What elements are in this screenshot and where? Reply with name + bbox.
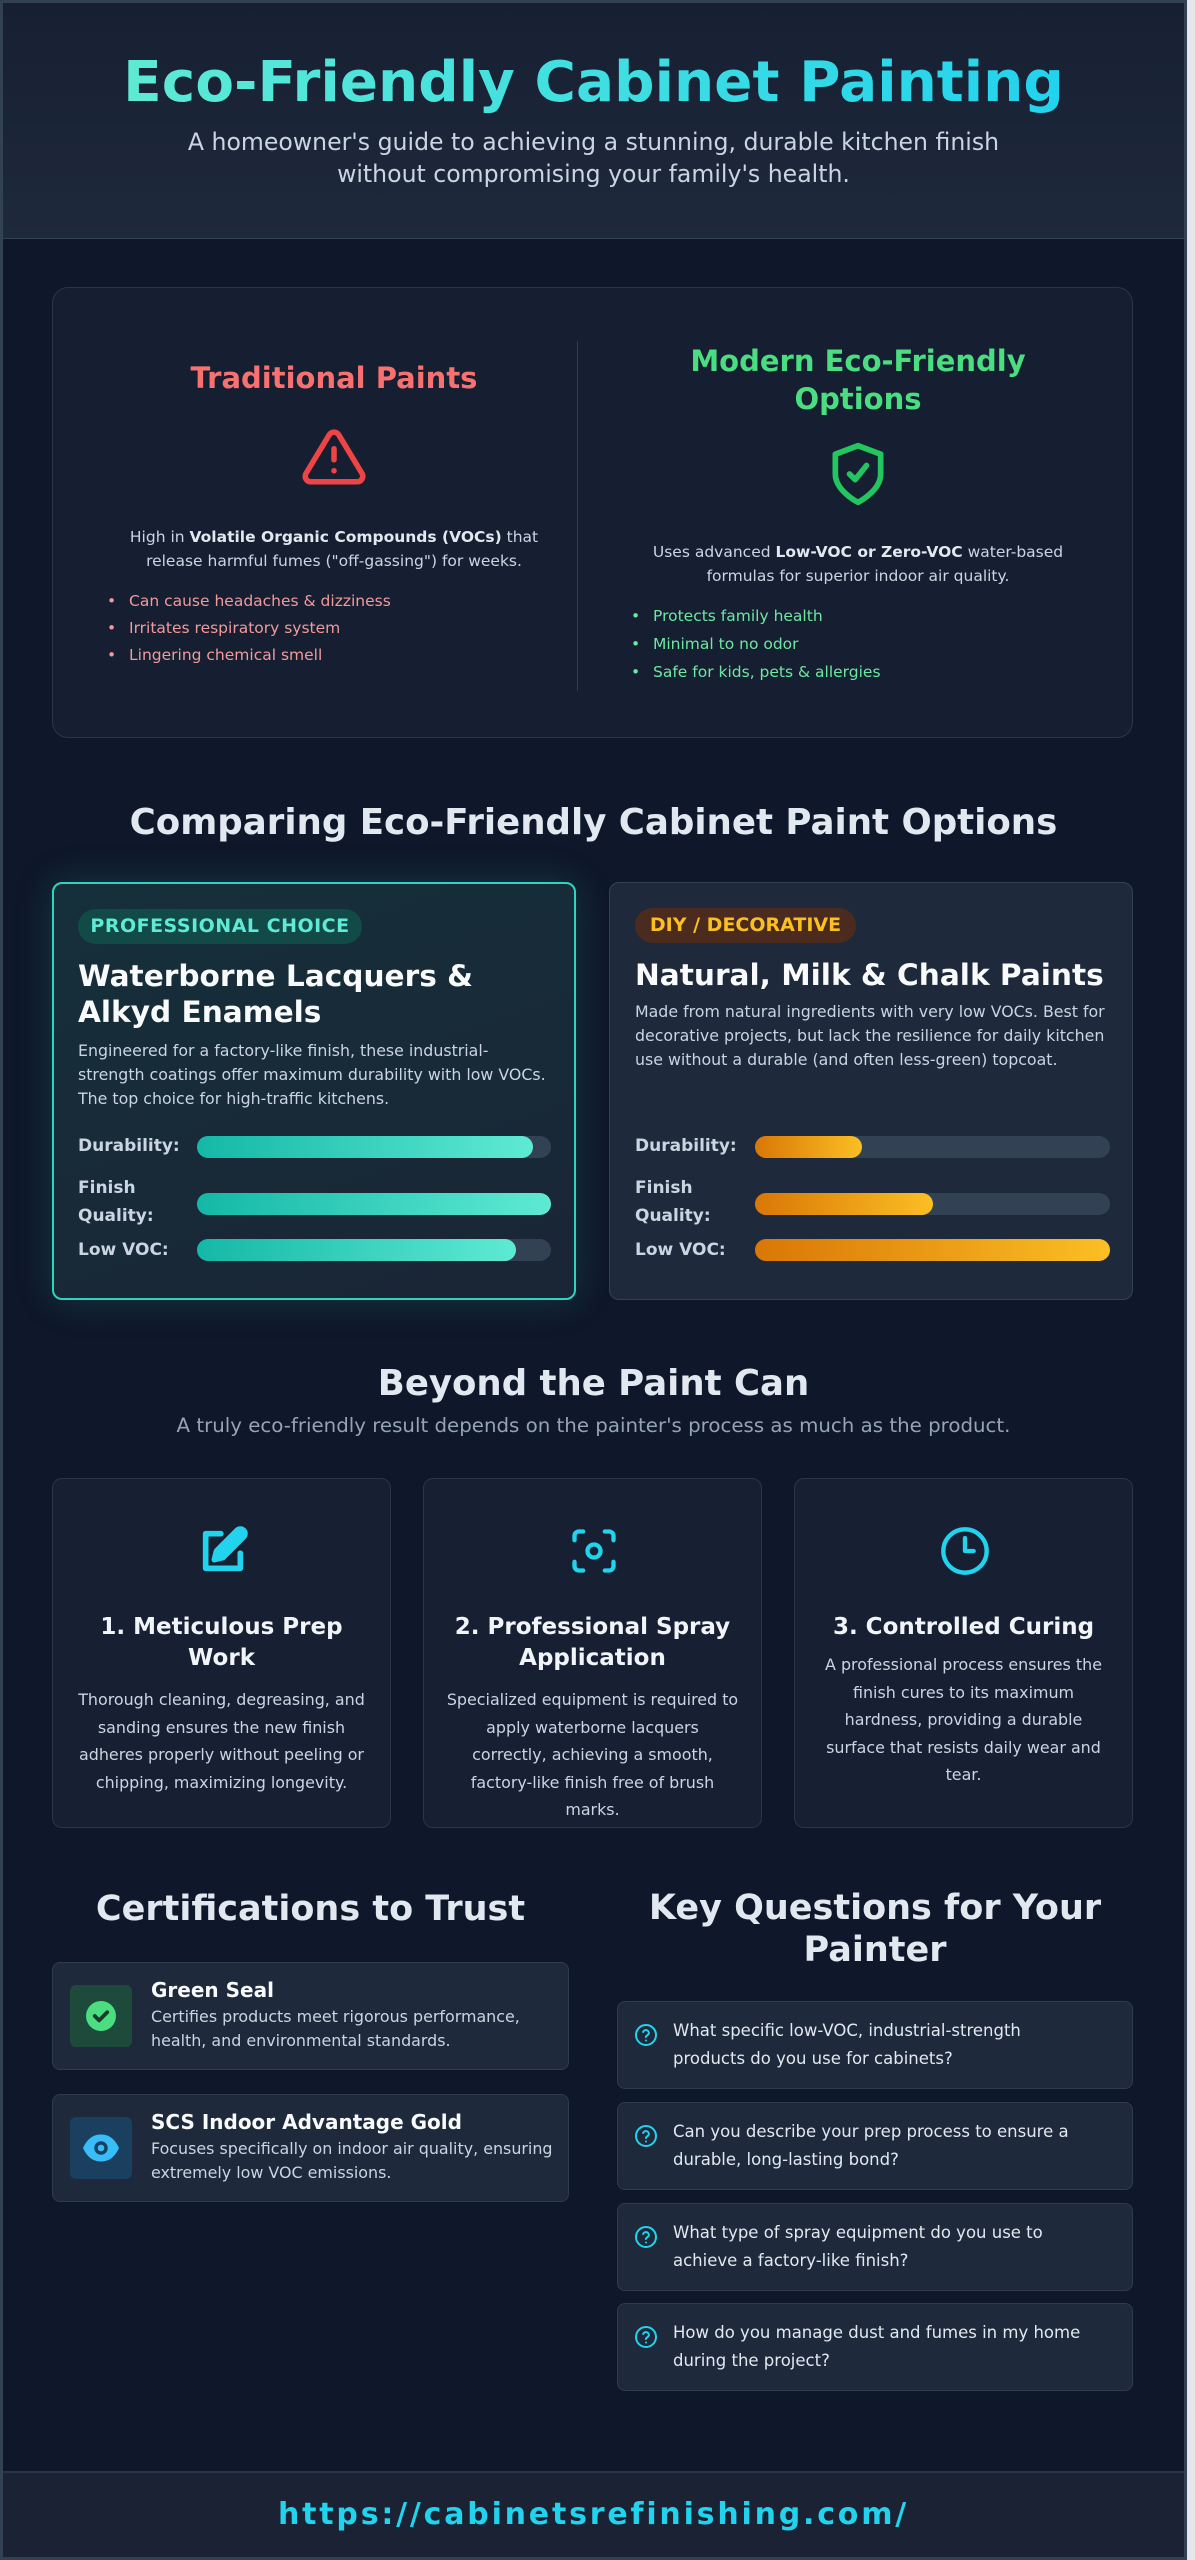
step 1: prep work: adheres properly without peeling or [79, 1745, 364, 1764]
step 3: curing: 3. Controlled Curing [833, 1614, 1094, 1640]
bar chart: ratings: Finish [78, 1178, 136, 1198]
icon: edit [202, 1526, 248, 1572]
list traditional: Can cause headaches & dizziness [129, 592, 391, 610]
header [3, 3, 1184, 239]
icon: question [635, 2125, 657, 2147]
badge diy [635, 908, 856, 943]
icon: focus [572, 1529, 616, 1573]
question 3 [617, 2203, 1133, 2291]
description [635, 1002, 1105, 1069]
step 1: prep work: 1. Meticulous Prep [100, 1614, 343, 1640]
bar chart: ratings: Low VOC: [635, 1240, 726, 1260]
list eco [633, 607, 881, 681]
bar chart: ratings [635, 1136, 1110, 1261]
question 4: during the project? [673, 2351, 830, 2370]
cert: scs indoor advantage: SCS Indoor Advantage Gold [151, 2110, 462, 2134]
icon: question [635, 2024, 657, 2046]
step 3: curing: hardness, providing a durable [845, 1710, 1082, 1729]
text eco [653, 543, 1063, 585]
traditional column [109, 361, 538, 664]
icon: clock [941, 1527, 989, 1575]
cert: scs indoor advantage: Focuses specifically on indoor air quality, ensuring [151, 2139, 553, 2158]
question 3: achieve a factory-like finish? [673, 2251, 908, 2270]
cert: scs indoor advantage: extremely low VOC emissions. [151, 2163, 391, 2182]
bar chart: ratings: Durability: [78, 1136, 180, 1156]
step 1: prep work [52, 1478, 391, 1828]
question 2 [617, 2102, 1133, 2190]
card title [78, 959, 473, 1029]
text traditional [130, 528, 538, 570]
list eco: Minimal to no odor [653, 635, 799, 653]
subtitle: A homeowner's guide to achieving a stunning, durable kitchen finish [188, 128, 999, 156]
question 4 [617, 2303, 1133, 2391]
footer url: https://cabinetsrefinishing.com/ [278, 2497, 909, 2532]
cert: scs indoor advantage [52, 2094, 569, 2202]
list eco: Protects family health [653, 607, 823, 625]
step 2: spray application: correctly, achieving a smooth, [472, 1745, 713, 1764]
subtitle [188, 128, 999, 188]
heading eco [690, 344, 1026, 416]
question 2: durable, long-lasting bond? [673, 2150, 899, 2169]
step 2: spray application [423, 1478, 762, 1828]
cert: green seal: health, and environmental standards. [151, 2031, 451, 2050]
icon: check circle [70, 1985, 132, 2047]
description: decorative projects, but lack the resilience for daily kitchen [635, 1026, 1104, 1045]
heading: certifications: Certifications to Trust [96, 1889, 525, 1929]
icon: question [635, 2226, 657, 2248]
step 2: spray application: apply waterborne lacquers [486, 1718, 699, 1736]
step 2: spray application: marks. [565, 1800, 620, 1819]
heading eco: Modern Eco-Friendly [690, 344, 1026, 378]
step 3: curing: finish cures to its maximum [853, 1682, 1074, 1702]
heading: key questions: Painter [804, 1930, 946, 1970]
description: strength coatings offer maximum durability with low VOCs. [78, 1065, 546, 1084]
card: natural milk chalk paints [609, 882, 1133, 1300]
step 1: prep work: chipping, maximizing longevity. [96, 1772, 347, 1792]
panel: traditional vs eco comparison [52, 287, 1133, 738]
bar chart: ratings: Low VOC: [78, 1240, 169, 1260]
question 1: products do you use for cabinets? [673, 2049, 953, 2068]
description: Made from natural ingredients with very low VOCs. Best for [635, 1002, 1105, 1021]
icon: warning [302, 429, 366, 484]
heading traditional: Traditional Paints [191, 361, 477, 395]
text eco: Uses advanced Low-VOC or Zero-VOC water-based [653, 543, 1063, 561]
subtitle beyond: A truly eco-friendly result depends on the painter's process as much as the product. [176, 1414, 1010, 1437]
heading: key questions: Key Questions for Your [649, 1888, 1101, 1928]
cert: green seal: Certifies products meet rigorous performance, [151, 2007, 520, 2026]
step 3: curing: tear. [946, 1765, 981, 1784]
list traditional: Irritates respiratory system [129, 619, 340, 637]
card title: Natural, Milk & Chalk Paints [635, 958, 1104, 992]
card: waterborne lacquers [52, 882, 576, 1300]
heading: beyond the paint can: Beyond the Paint Can [378, 1363, 809, 1404]
heading: key questions [649, 1888, 1102, 1970]
list eco: Safe for kids, pets & allergies [653, 663, 881, 681]
heading eco: Options [794, 382, 922, 416]
question 4: How do you manage dust and fumes in my home [673, 2323, 1080, 2342]
icon: shield check [832, 442, 884, 506]
subtitle: without compromising your family's health. [337, 160, 850, 188]
description: Engineered for a factory-like finish, these industrial- [78, 1041, 488, 1060]
card title: Alkyd Enamels [78, 995, 321, 1029]
step 1: prep work: Work [188, 1645, 255, 1671]
badge diy: DIY / DECORATIVE [650, 914, 841, 936]
icon: question [635, 2326, 657, 2348]
footer [3, 2471, 1184, 2560]
cert: green seal [52, 1962, 569, 2070]
bar chart: ratings: Quality: [635, 1206, 711, 1226]
step 2: spray application: Application [519, 1645, 666, 1671]
heading: comparing options: Comparing Eco-Friendly Cabinet Paint Options [130, 802, 1057, 843]
description: The top choice for high-traffic kitchens. [78, 1089, 389, 1108]
badge professional choice: PROFESSIONAL CHOICE [90, 915, 350, 937]
cert: green seal: Green Seal [151, 1978, 274, 2002]
list traditional: Lingering chemical smell [129, 646, 322, 664]
bar chart: ratings: Finish [635, 1178, 693, 1198]
text eco: formulas for superior indoor air quality. [707, 567, 1009, 585]
text traditional: High in Volatile Organic Compounds (VOCs) that [130, 528, 538, 546]
question 1: What specific low-VOC, industrial-strength [673, 2021, 1021, 2040]
eco column [633, 344, 1063, 681]
badge professional choice [78, 909, 362, 944]
list traditional [109, 592, 391, 664]
question 1 [617, 2001, 1133, 2089]
bar chart: ratings [78, 1136, 551, 1261]
text traditional: release harmful fumes ("off-gassing") for weeks. [146, 552, 522, 570]
icon: eye [70, 2117, 132, 2179]
step 3: curing: surface that resists daily wear and [826, 1738, 1101, 1756]
step 1: prep work: Thorough cleaning, degreasing, and [78, 1690, 365, 1709]
question 3: What type of spray equipment do you use to [673, 2223, 1043, 2242]
question 2: Can you describe your prep process to ensure a [673, 2122, 1069, 2141]
step 1: prep work: sanding ensures the new finish [98, 1718, 345, 1736]
bar chart: ratings: Quality: [78, 1206, 154, 1226]
title: Eco-Friendly Cabinet Painting [123, 50, 1064, 115]
step 2: spray application: 2. Professional Spray [455, 1614, 730, 1640]
card title: Waterborne Lacquers & [78, 959, 473, 993]
step 3: curing: A professional process ensures the [825, 1655, 1102, 1674]
description [78, 1041, 546, 1108]
bar chart: ratings: Durability: [635, 1136, 737, 1156]
step 2: spray application: Specialized equipment is required to [447, 1690, 738, 1709]
step 2: spray application: factory-like finish free of brush [471, 1772, 714, 1792]
step 3: curing [794, 1478, 1133, 1828]
description: use without a durable (and often less-green) topcoat. [635, 1050, 1057, 1069]
